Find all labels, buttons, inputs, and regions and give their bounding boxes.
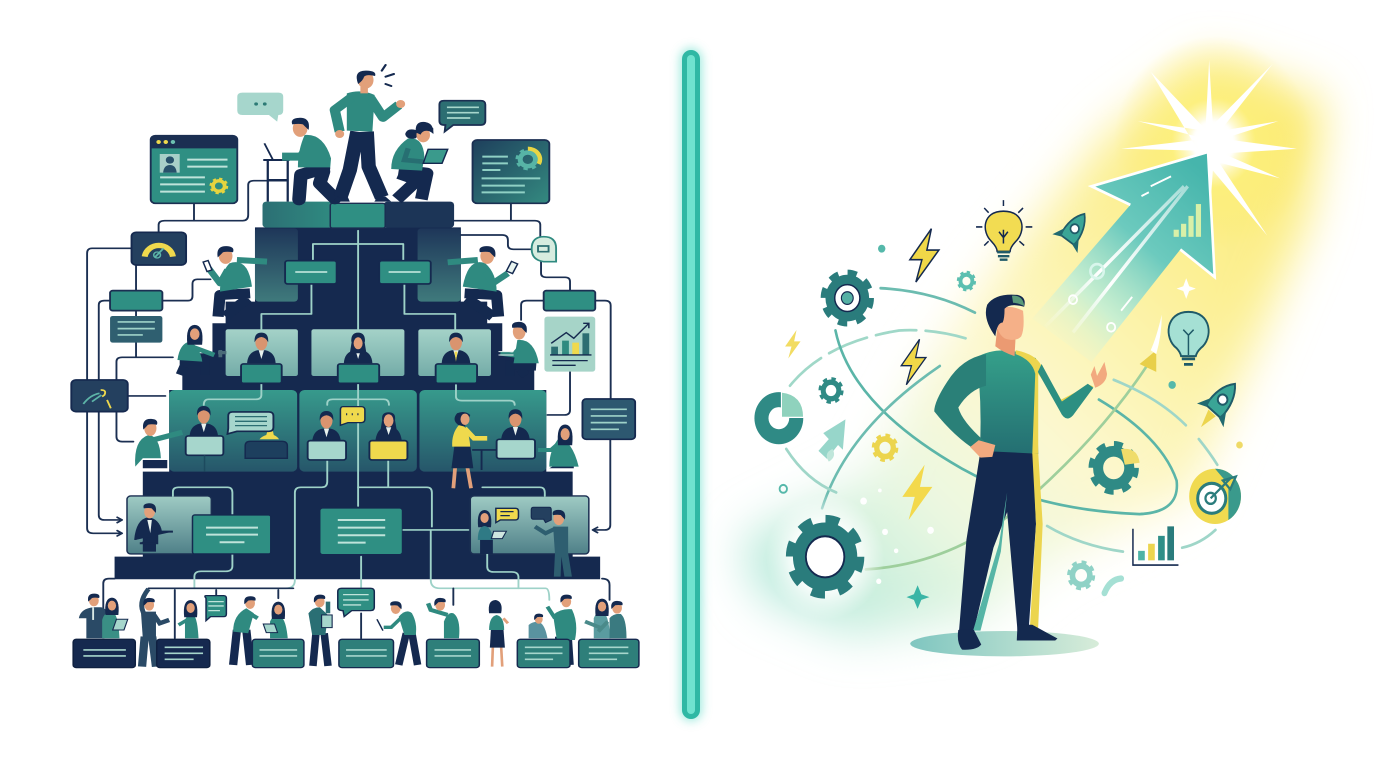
note bubble: [205, 596, 226, 621]
speech note bubble: [338, 588, 374, 617]
woman standing: [489, 600, 508, 667]
icon: teal light bulb: [1169, 312, 1209, 364]
decorative dots and sparkles: [780, 245, 1243, 609]
big upward arrow: [1032, 152, 1215, 362]
gauge card: [132, 232, 186, 265]
arrow card: [71, 380, 128, 412]
right label box: [544, 291, 595, 311]
icon: faded arrow: [818, 419, 845, 462]
team panel at right: [478, 507, 572, 577]
icon: bar chart: [1133, 526, 1178, 565]
small arrowhead: [1140, 315, 1162, 372]
icon: large gear bottom left: [766, 494, 884, 620]
left arm: [934, 354, 986, 451]
chat badge: [532, 237, 556, 262]
woman 3: [179, 600, 199, 638]
man with tablet: [308, 595, 332, 666]
upper row managers: [241, 333, 477, 383]
left label boxes: [110, 291, 162, 343]
floor shadow: [910, 631, 1099, 656]
pair 1: [79, 594, 128, 638]
label boxes on the upper tier: [285, 261, 431, 284]
bottom label boxes: [73, 639, 639, 668]
divider: glowing vertical bar: [680, 48, 702, 721]
speech bubble: mint: [237, 93, 283, 122]
pair 11: [585, 599, 626, 638]
shoes: [958, 625, 1057, 650]
managers and desks: [186, 406, 535, 472]
icon: gear with yellow pie: [1092, 445, 1140, 491]
figure: left kneeling woman: [177, 325, 226, 375]
figure: crouching laptop worker: [391, 122, 448, 199]
right arm: [1038, 364, 1093, 419]
figure: left phone user: [203, 246, 267, 317]
orbit lines: [786, 288, 1217, 569]
figure: right tablet user: [448, 246, 518, 317]
icon: glowing light bulb: [976, 200, 1032, 260]
panel: individual momentum scene: [740, 36, 1325, 656]
window card: profile: [151, 136, 237, 203]
figure: standing leader: [333, 65, 405, 202]
speech bubble: dark: [439, 101, 485, 132]
note card right: [582, 399, 635, 439]
hands: [970, 362, 1107, 458]
hair: [986, 295, 1025, 336]
internal connector lines: [150, 231, 549, 600]
icon: pie chart: [754, 392, 804, 444]
seated woman at right: [538, 424, 579, 468]
icon: target badge: [1189, 469, 1241, 524]
raised arm man: [141, 589, 169, 667]
pyramid body: [115, 202, 600, 579]
pair 10: [529, 595, 576, 665]
window card: settings: [473, 140, 549, 203]
trousers: [959, 451, 1043, 635]
shirt trim: [1016, 350, 1093, 454]
left pointing colleague: [135, 419, 182, 468]
icon: small gears: [820, 272, 1093, 588]
figure: man looking at arrow: [934, 295, 1107, 650]
chart card: [544, 317, 595, 372]
bottom people: [79, 588, 626, 667]
leaning laptop man: [377, 601, 418, 665]
meeting speech bubbles: [227, 407, 365, 434]
external connector lines: [87, 181, 611, 638]
neck and head: [995, 328, 1016, 356]
panel: organisational hierarchy pyramid: [71, 65, 639, 668]
woman in yellow: [451, 412, 487, 488]
bending man and woman: [233, 596, 288, 665]
icon: rocket right: [1188, 372, 1248, 439]
bending man 8: [428, 598, 459, 638]
figure: laptop worker at desk: [263, 118, 335, 202]
icon: lightning bolts: [785, 229, 939, 520]
icon: rocket top: [1052, 205, 1097, 253]
presenter panel: [135, 503, 271, 554]
background light beam: [740, 62, 1325, 635]
figure: right seated analyst: [499, 322, 539, 376]
central note: [320, 509, 402, 554]
torso: [977, 350, 1038, 454]
sun burst: [1114, 36, 1314, 249]
icon: large gear top left: [824, 274, 870, 323]
middle row meeting people: [73, 399, 639, 668]
